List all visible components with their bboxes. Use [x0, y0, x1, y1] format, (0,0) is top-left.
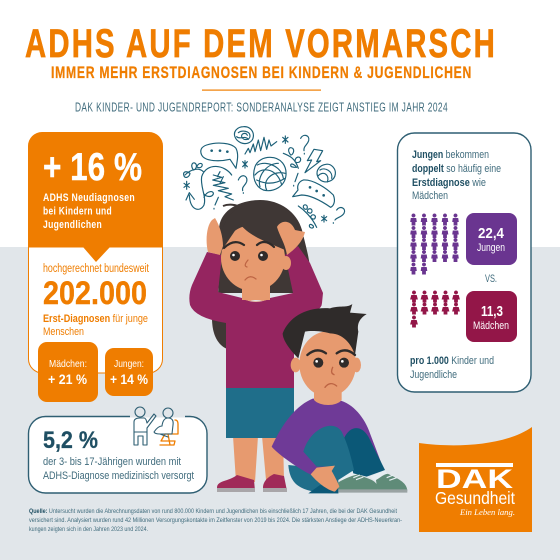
orange header with notch — [28, 132, 163, 262]
intro text — [412, 149, 501, 202]
girl hair back — [212, 318, 227, 349]
logo: DAK Gesundheit — [419, 427, 532, 532]
description: ADHS-Diagnose medizinisch versorgt — [43, 470, 194, 482]
girl eyes and mouth — [224, 242, 274, 280]
icon: consultation — [134, 407, 178, 445]
stat box: boys — [105, 348, 153, 396]
boy trousers base — [288, 465, 338, 493]
panel: boys versus girls — [398, 133, 531, 392]
stat box: girls rate: Mädchen — [473, 320, 509, 332]
girl shoes — [217, 474, 287, 492]
stat box: girls rate: 11,3 — [481, 304, 503, 320]
source note — [29, 508, 402, 533]
stat box: girls — [38, 342, 98, 402]
boy shoes — [338, 474, 407, 493]
footnote text: Jugendliche — [410, 369, 457, 381]
intro text: doppelt so häufig eine — [412, 163, 501, 175]
pictogram: boys — [410, 214, 459, 274]
source note: versichert sind. Analysiert wurden rund 42 Millionen Versorgungskontakte im Zeitfenster von 2019 bis 2024. Die stärksten Anstiege der ADHS-Neuerkran- — [29, 517, 402, 524]
girl skirt — [226, 386, 294, 438]
footnote text: pro 1.000 Kinder und — [410, 355, 494, 367]
logo: DAK Gesundheit: Ein Leben lang. — [459, 508, 515, 517]
logo: DAK Gesundheit: DAK — [436, 464, 514, 494]
intro text: Mädchen — [412, 190, 448, 202]
stat box: girls: Mädchen: — [49, 358, 87, 370]
description: der 3- bis 17-Jährigen wurden mit — [43, 456, 181, 468]
boy body — [272, 398, 407, 493]
boy hair — [283, 304, 367, 358]
header description: Jugendlichen — [43, 219, 102, 231]
girl neck — [242, 286, 270, 300]
stat box: boys: Jungen: — [114, 358, 144, 370]
big percentage: + 16 % — [43, 146, 142, 189]
boy face — [299, 331, 356, 397]
intro text: Jungen bekommen — [412, 149, 489, 161]
boy socks — [338, 469, 387, 481]
number description second line: Menschen — [43, 326, 84, 338]
stat box: girls rate — [466, 291, 517, 342]
girl face — [221, 225, 285, 291]
boy right leg — [344, 428, 385, 477]
stat box: girls: + 21 % — [48, 372, 87, 387]
stat box: boys rate: Jungen — [477, 242, 505, 254]
logo: DAK Gesundheit: Gesundheit — [435, 488, 515, 508]
boy eyes and mouth — [307, 350, 355, 387]
versus label: VS. — [485, 273, 497, 285]
girl hands — [207, 218, 305, 255]
pictogram: girls — [410, 290, 460, 328]
illustration: girl — [189, 200, 323, 492]
source note: kungen zeigten sich in den Jahren 2023 und 2024. — [29, 526, 148, 533]
footnote text — [410, 355, 494, 381]
stat box: boys: + 14 % — [110, 372, 148, 387]
number description: Erst-Diagnosen für junge — [43, 313, 148, 325]
stat box: boys rate — [466, 213, 517, 265]
panel: medical care share — [28, 407, 207, 493]
source note: Quelle: Untersucht wurden die Abrechnungsdaten von rund 800.000 Kindern und Jugendlichen bis einschließlich 17 Jahren, die bei der DAK Gesundheit — [29, 508, 397, 515]
boy sweater — [272, 398, 383, 475]
big number: 202.000 — [43, 275, 147, 311]
boy head — [283, 304, 367, 405]
header description: ADHS Neudiagnosen — [43, 192, 135, 204]
illustration: thought doodles — [184, 127, 345, 228]
boy left leg — [303, 426, 354, 480]
boy hand — [311, 466, 339, 492]
extrapolation label: hochgerechnet bundesweit — [43, 263, 150, 275]
girl fringe — [220, 201, 302, 253]
boy neck — [314, 390, 342, 405]
header description: bei Kindern und — [43, 206, 112, 218]
header description — [43, 192, 135, 231]
panel: new diagnoses — [28, 132, 163, 402]
intro text: Erstdiagnose wie — [412, 177, 486, 189]
description — [43, 456, 194, 482]
stat box: boys rate: 22,4 — [478, 226, 504, 242]
illustration: boy — [272, 304, 407, 493]
girl legs — [233, 436, 284, 482]
girl sweater — [189, 246, 323, 388]
big percentage: 5,2 % — [43, 427, 98, 454]
